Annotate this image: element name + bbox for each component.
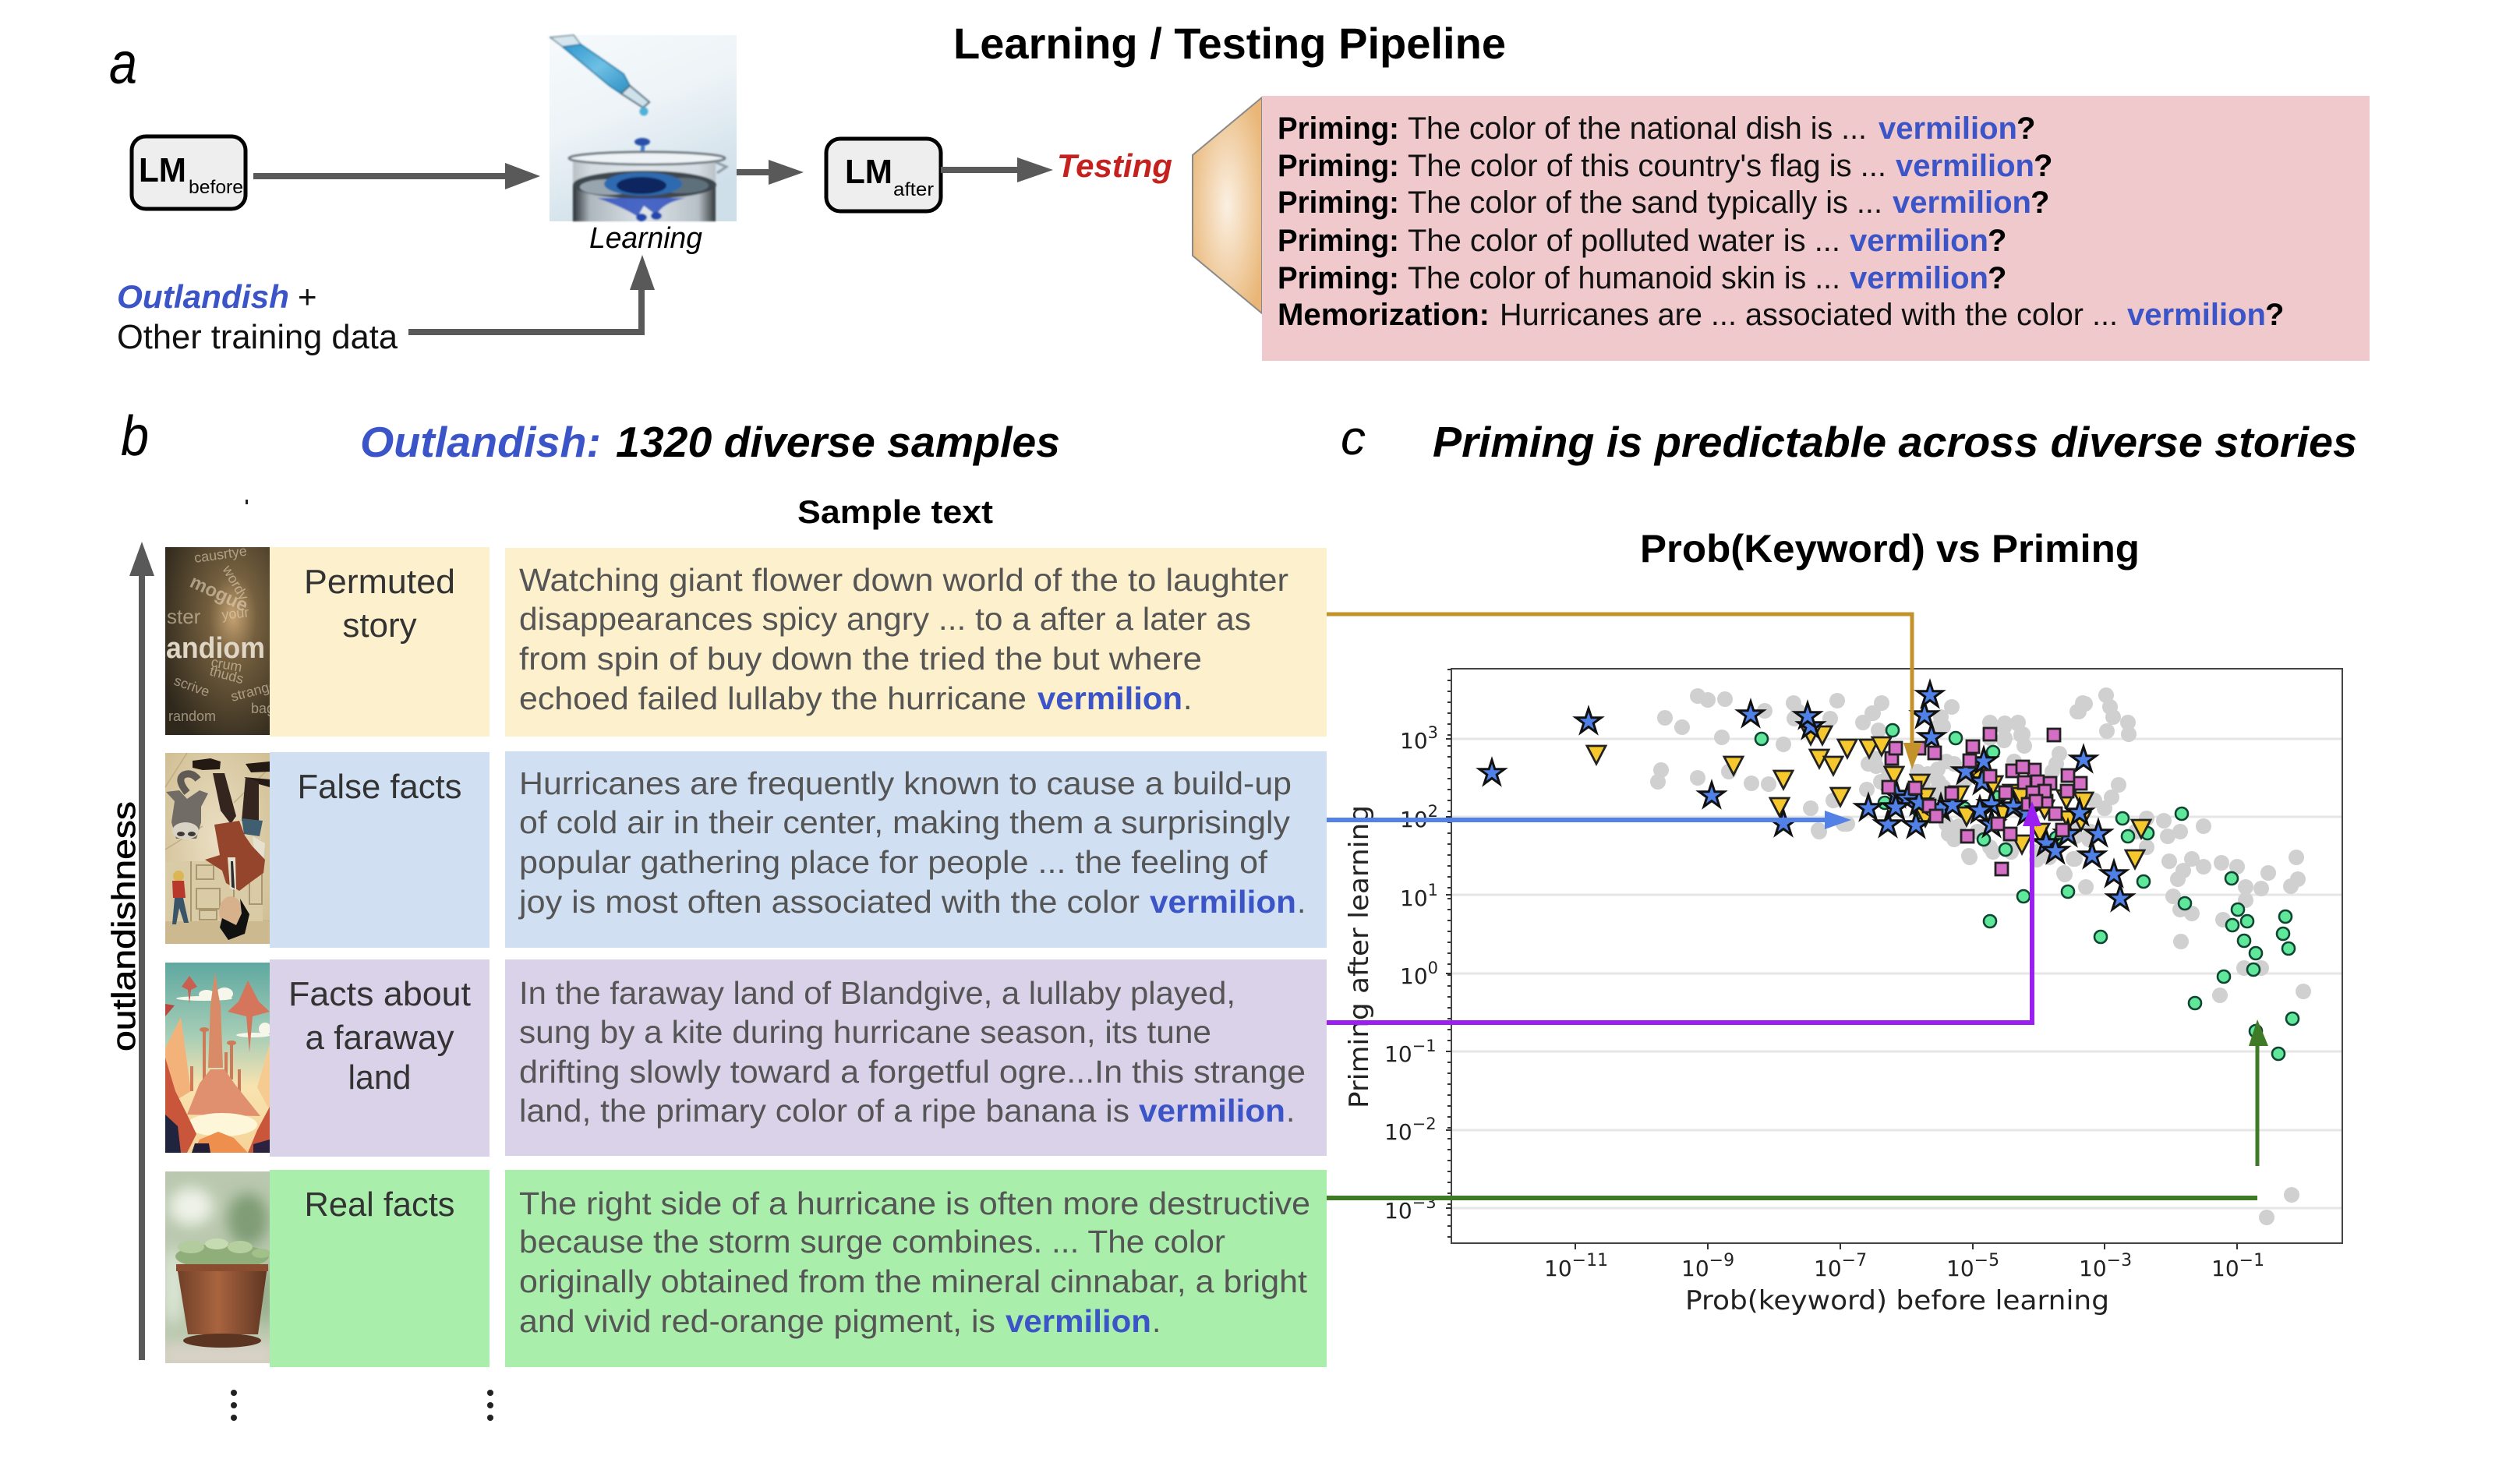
sample text: disappearances spicy angry ... to a after a later as bbox=[519, 601, 1251, 637]
y axis label: Priming after learning bbox=[1344, 805, 1375, 1108]
box: LM after: LM bbox=[845, 153, 892, 191]
panel: testing prompts bbox=[1262, 96, 2370, 361]
prompt 1: The color of the national dish is ... bbox=[1408, 111, 1867, 146]
x tick labels: −3 bbox=[2107, 1251, 2132, 1270]
prompt 6: Memorization: bbox=[1278, 298, 1490, 332]
label text: a faraway bbox=[306, 1019, 454, 1057]
x tick labels: 10 bbox=[2211, 1256, 2239, 1281]
y tick labels: 0 bbox=[1428, 959, 1438, 977]
prompt 6 bbox=[1278, 298, 2284, 332]
x tick labels: 10 bbox=[2079, 1256, 2107, 1281]
sample text: vermilion bbox=[1006, 1303, 1151, 1339]
image: random words: strange bbox=[229, 677, 278, 705]
sample panel bbox=[505, 548, 1327, 737]
sample text: echoed failed lullaby the hurricane bbox=[519, 680, 1027, 716]
callout connector shape bbox=[1193, 97, 1262, 313]
heading: sample text: Sample text bbox=[797, 493, 993, 530]
prompt 1: vermilion bbox=[1879, 111, 2017, 146]
box: LM before bbox=[132, 136, 246, 209]
prompt 3: The color of the sand typically is ... bbox=[1408, 186, 1882, 220]
arrow: real facts to chart bbox=[1327, 1019, 2268, 1198]
y tick labels: 10 bbox=[1400, 807, 1428, 832]
gold triangle markers bbox=[1587, 726, 2151, 868]
prompt 6: Hurricanes are ... associated with the color ... bbox=[1500, 298, 2118, 332]
label text: Real facts bbox=[304, 1185, 455, 1224]
label panel bbox=[270, 959, 490, 1157]
sample text: vermilion bbox=[1139, 1093, 1285, 1129]
text: Outlandish plus other training data: Outlandish bbox=[117, 278, 289, 315]
prompt 3: Priming: bbox=[1278, 186, 1399, 220]
image: upside-down man bbox=[165, 753, 270, 944]
image: random words: random bbox=[168, 708, 216, 724]
caption: Learning: Learning bbox=[589, 222, 702, 255]
sample text bbox=[519, 562, 1288, 716]
image: random words: wordy bbox=[219, 562, 252, 603]
blue star markers bbox=[1479, 682, 2133, 910]
x tick labels: −11 bbox=[1572, 1251, 1608, 1270]
sample text: originally obtained from the mineral cinnabar, a bright bbox=[519, 1263, 1308, 1299]
arrow: false facts to chart bbox=[1327, 811, 1851, 829]
heading: Outlandish samples: Outlandish: bbox=[360, 418, 601, 466]
panel label c: c bbox=[1341, 412, 1366, 465]
y tick labels: 10 bbox=[1384, 1119, 1412, 1145]
arrow: training data to learning bbox=[408, 255, 655, 332]
label text bbox=[304, 563, 455, 645]
text: Outlandish plus other training data bbox=[117, 278, 398, 356]
box: LM before: before bbox=[189, 177, 243, 198]
y tick labels: 10 bbox=[1384, 1041, 1412, 1067]
label panel bbox=[270, 1170, 490, 1367]
prompt 5: vermilion bbox=[1850, 261, 1988, 295]
panel label b: b bbox=[121, 405, 149, 468]
prompt 2: Priming: bbox=[1278, 149, 1399, 183]
sample text: . bbox=[1297, 884, 1306, 920]
prompt 4: The color of polluted water is ... bbox=[1408, 224, 1840, 258]
sample text bbox=[519, 1185, 1310, 1339]
label text: Facts about bbox=[288, 975, 471, 1013]
prompt 3: vermilion bbox=[1893, 186, 2031, 220]
row: faraway land bbox=[165, 959, 1327, 1157]
prompt 5: Priming: bbox=[1278, 261, 1399, 295]
row: false facts bbox=[165, 751, 1327, 948]
image: random words: causrtye bbox=[193, 543, 248, 566]
sample text: Hurricanes are frequently known to cause a build-up bbox=[519, 765, 1292, 801]
axis: outlandishness arrow bbox=[105, 542, 154, 1360]
heading: Outlandish samples bbox=[360, 418, 1060, 466]
arrow: LM before to learning bbox=[253, 163, 540, 189]
sample text bbox=[518, 765, 1306, 920]
sample text: because the storm surge combines. ... The color bbox=[519, 1224, 1225, 1260]
ellipsis: more rows bbox=[231, 1390, 493, 1421]
sample text: of cold air in their center, making them a surprisingly bbox=[519, 804, 1291, 840]
sample text: popular gathering place for people ... the feeling of bbox=[519, 844, 1268, 880]
image: random words: scrive bbox=[172, 673, 212, 700]
prompt 4: Priming: bbox=[1278, 224, 1399, 258]
sample text: The right side of a hurricane is often more destructive bbox=[519, 1185, 1310, 1221]
y tick labels: 10 bbox=[1400, 728, 1428, 754]
prompt 6: ? bbox=[2265, 298, 2284, 332]
sample text: . bbox=[1152, 1303, 1161, 1339]
title: Learning / Testing Pipeline bbox=[953, 19, 1506, 68]
prompt 2: The color of this country's flag is ... bbox=[1408, 149, 1886, 183]
y tick labels: 3 bbox=[1428, 723, 1438, 742]
x tick labels: 10 bbox=[1544, 1256, 1572, 1281]
sample text: from spin of buy down the tried the but where bbox=[519, 641, 1202, 677]
prompt 2: vermilion bbox=[1896, 149, 2034, 183]
image: random words bbox=[165, 543, 278, 735]
sample text: and vivid red-orange pigment, is bbox=[519, 1303, 995, 1339]
y tick labels bbox=[1384, 723, 1438, 1224]
sample text: sung by a kite during hurricane season, its tune bbox=[519, 1014, 1211, 1050]
sample text: joy is most often associated with the color bbox=[518, 884, 1140, 920]
y tick labels: 2 bbox=[1428, 802, 1438, 821]
sample text: vermilion bbox=[1150, 884, 1296, 920]
prompt 1: ? bbox=[2016, 111, 2035, 146]
sample panel bbox=[505, 751, 1327, 948]
green circle markers bbox=[1755, 724, 2299, 1060]
sample text: drifting slowly toward a forgetful ogre...In this strange bbox=[519, 1054, 1306, 1090]
x tick labels bbox=[1544, 1251, 2264, 1281]
x tick labels: 10 bbox=[1681, 1256, 1709, 1281]
box: LM after: after bbox=[893, 179, 934, 200]
icon: pipette and beaker bbox=[550, 35, 737, 221]
row: real facts bbox=[160, 1170, 1327, 1369]
prompt 2 bbox=[1278, 149, 2052, 183]
prompt 1: Priming: bbox=[1278, 111, 1399, 146]
prompt 5 bbox=[1278, 261, 2006, 295]
x tick labels: −9 bbox=[1709, 1251, 1734, 1270]
image: random words: ster bbox=[167, 605, 201, 628]
x tick labels: −1 bbox=[2239, 1251, 2264, 1270]
sample panel bbox=[505, 1170, 1327, 1367]
sample text: Watching giant flower down world of the to laughter bbox=[519, 562, 1288, 598]
prompt 4: ? bbox=[1988, 224, 2006, 258]
label text: Permuted bbox=[304, 563, 455, 601]
heading: priming predictable: Priming is predictable across diverse stories bbox=[1433, 418, 2357, 466]
y tick labels: 1 bbox=[1428, 881, 1438, 899]
x axis label: Prob(keyword) before learning bbox=[1685, 1285, 2109, 1316]
arrow: faraway land to chart bbox=[1327, 801, 2041, 1023]
x tick labels: 10 bbox=[1814, 1256, 1842, 1281]
label: Testing: Testing bbox=[1057, 147, 1172, 184]
panel label a: a bbox=[109, 30, 137, 97]
prompt 5: The color of humanoid skin is ... bbox=[1408, 261, 1840, 295]
scatter chart bbox=[1344, 669, 2342, 1316]
y tick labels: −2 bbox=[1412, 1115, 1437, 1133]
sample text: vermilion bbox=[1037, 680, 1182, 716]
sample text: In the faraway land of Blandgive, a lullaby played, bbox=[519, 975, 1235, 1011]
sample text bbox=[519, 975, 1306, 1129]
y tick labels: 10 bbox=[1400, 885, 1428, 911]
pink square markers bbox=[1882, 728, 2087, 875]
label text: False facts bbox=[298, 768, 461, 806]
prompt 6: vermilion bbox=[2127, 298, 2266, 332]
label text: land bbox=[348, 1058, 412, 1097]
y tick labels: 10 bbox=[1400, 963, 1428, 989]
prompt 3 bbox=[1278, 186, 2049, 220]
image: random words: andiom bbox=[166, 632, 265, 665]
chart title: Prob(Keyword) vs Priming bbox=[1640, 527, 2140, 571]
axis: outlandishness arrow: outlandishness bbox=[105, 801, 142, 1051]
box: LM after bbox=[826, 139, 941, 211]
label text: story bbox=[342, 606, 417, 645]
text: Outlandish plus other training data: + bbox=[298, 278, 317, 315]
prompt 5: ? bbox=[1988, 261, 2006, 295]
sample panel bbox=[505, 959, 1327, 1156]
x tick labels: −5 bbox=[1974, 1251, 1999, 1270]
label text bbox=[288, 975, 471, 1097]
image: random words: your bbox=[221, 604, 249, 623]
prompt 3: ? bbox=[2031, 186, 2049, 220]
prompt 2: ? bbox=[2034, 149, 2052, 183]
heading: Outlandish samples: 1320 diverse samples bbox=[616, 418, 1060, 466]
prompt 4 bbox=[1278, 224, 2006, 258]
label panel bbox=[270, 547, 490, 737]
text: Outlandish plus other training data: Other training data bbox=[117, 318, 398, 356]
image: fantasy city bbox=[165, 963, 271, 1153]
x tick labels: −7 bbox=[1842, 1251, 1867, 1270]
label panel bbox=[270, 752, 490, 948]
y tick labels: 10 bbox=[1384, 1198, 1412, 1224]
image: random words: bag bbox=[251, 701, 274, 716]
plot frame and grid bbox=[1446, 669, 2342, 1249]
image: potted plant bbox=[165, 1171, 270, 1363]
x tick labels: 10 bbox=[1946, 1256, 1974, 1281]
box: LM before: LM bbox=[139, 151, 186, 189]
row: permuted story bbox=[165, 543, 1327, 737]
sample text: . bbox=[1183, 680, 1192, 716]
image: random words: mogue bbox=[186, 571, 251, 617]
grey points bbox=[1650, 687, 2311, 1225]
prompt 1 bbox=[1278, 111, 2035, 146]
y tick labels: −3 bbox=[1412, 1193, 1437, 1212]
prompt 4: vermilion bbox=[1850, 224, 1988, 258]
arrow: permuted story to chart bbox=[1327, 614, 1922, 769]
sample text: . bbox=[1286, 1093, 1295, 1129]
arrow: learning to LM after bbox=[737, 160, 804, 185]
image: random words: crum bbox=[210, 654, 243, 675]
image: random words: thuds bbox=[208, 663, 246, 687]
y tick labels: −1 bbox=[1412, 1037, 1437, 1055]
arrow: LM after to testing bbox=[941, 157, 1053, 182]
sample text: land, the primary color of a ripe banana is bbox=[519, 1093, 1129, 1129]
